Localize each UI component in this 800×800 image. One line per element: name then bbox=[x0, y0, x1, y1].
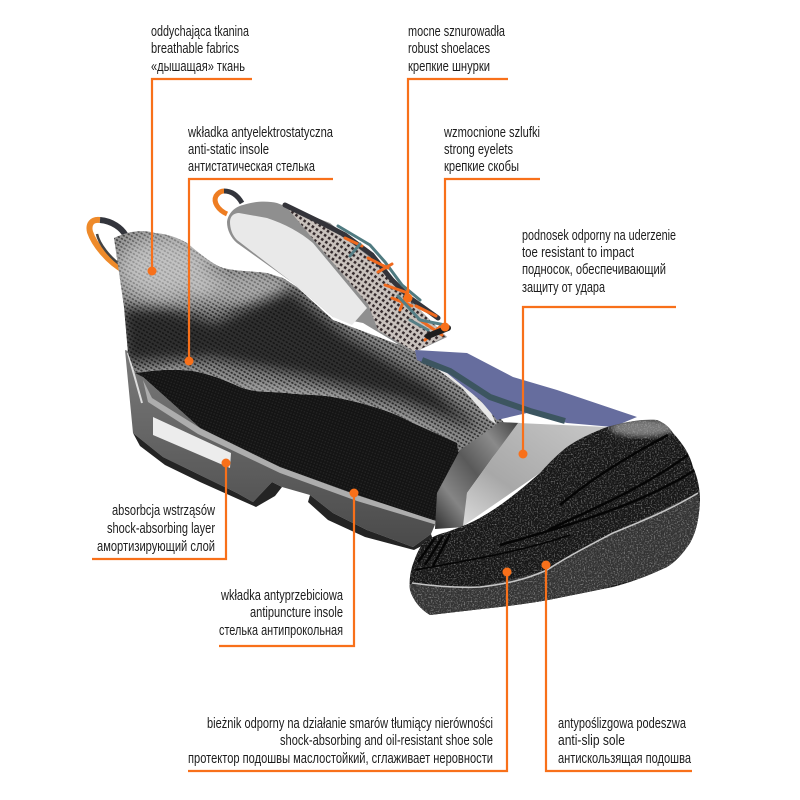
callout: anti-static insole: anti-static insole bbox=[188, 142, 269, 158]
callout: robust shoelaces: mocne sznurowadła bbox=[408, 24, 506, 40]
callout: antipuncture insole: antipuncture insole bbox=[250, 605, 343, 621]
callout: shock-absorbing layer: absorbcja wstrząsów bbox=[112, 503, 215, 519]
callout: impact resistant toe bbox=[518, 228, 676, 458]
callout: robust shoelaces bbox=[404, 24, 508, 302]
callout: antipuncture insole: стелька антипрокольная bbox=[219, 623, 343, 639]
callout: robust shoelaces: robust shoelaces bbox=[408, 41, 490, 57]
callout: impact resistant toe: подносок, обеспечивающий bbox=[522, 262, 666, 278]
callout: shock-absorbing layer: амортизирующий слой bbox=[97, 539, 215, 555]
callout: anti-slip sole bbox=[542, 560, 692, 771]
lace area mesh bbox=[285, 205, 446, 352]
breathable fabric upper bbox=[110, 225, 510, 455]
shoe illustration bbox=[89, 191, 710, 620]
callout: shoe sole bbox=[188, 568, 512, 771]
callout: impact resistant toe: toe resistant to impact bbox=[522, 245, 634, 261]
icon: heel pull loop bbox=[89, 220, 126, 271]
shoe sole side bbox=[125, 350, 437, 550]
reflective heel line bbox=[128, 353, 142, 403]
callout: strong eyelets: strong eyelets bbox=[444, 142, 513, 158]
black inner sole bbox=[135, 370, 465, 522]
tongue outer layer bbox=[227, 202, 447, 353]
callout: anti-static insole: антистатическая стелька bbox=[188, 159, 316, 175]
callout: breathable fabrics: breathable fabrics bbox=[151, 41, 239, 57]
callout: shoe sole: shock-absorbing and oil-resistant shoe sole bbox=[280, 733, 493, 749]
callout: shoe sole: протектор подошвы маслостойкий, сглаживает неровности bbox=[188, 751, 493, 767]
callout: shock-absorbing layer: shock-absorbing layer bbox=[107, 521, 215, 537]
icon: tongue pull loop bbox=[215, 191, 242, 214]
callout: antipuncture insole bbox=[219, 488, 358, 646]
blue toe fabric bbox=[415, 350, 637, 427]
callout: anti-static insole: wkładka antyelektrostatyczna bbox=[187, 125, 334, 141]
callout: anti-slip sole: антискользящая подошва bbox=[558, 751, 692, 767]
callout: anti-slip sole: antypoślizgowa podeszwa bbox=[558, 716, 687, 732]
callout: impact resistant toe: podnosek odporny na uderzenie bbox=[522, 228, 676, 244]
callout: antipuncture insole: wkładka antyprzebiciowa bbox=[220, 588, 344, 604]
callout: breathable fabrics: «дышащая» ткань bbox=[151, 59, 245, 75]
callout: breathable fabrics: oddychająca tkanina bbox=[151, 24, 250, 40]
callout: strong eyelets: wzmocnione szlufki bbox=[443, 125, 540, 141]
callout: strong eyelets: крепкие скобы bbox=[444, 159, 519, 175]
callout: shock-absorbing layer bbox=[92, 458, 230, 559]
robust shoelaces bbox=[285, 205, 448, 340]
rubber toe bumper bbox=[410, 420, 700, 615]
steel toe cap bbox=[463, 423, 607, 526]
steel toe band bbox=[435, 422, 520, 529]
callout: anti-slip sole: anti-slip sole bbox=[558, 733, 625, 749]
callout: impact resistant toe: защиту от удара bbox=[522, 280, 606, 296]
white tongue insert bbox=[230, 213, 367, 325]
callout: shoe sole: bieżnik odporny na działanie smarów tłumiący nierówności bbox=[207, 716, 493, 732]
fabric stitching detail bbox=[422, 360, 565, 421]
callout: anti-static insole bbox=[184, 125, 334, 366]
inner fabric edge near toe bbox=[417, 350, 496, 424]
callout: breathable fabrics bbox=[148, 24, 252, 276]
callout: strong eyelets bbox=[440, 125, 540, 332]
callout: robust shoelaces: крепкие шнурки bbox=[408, 59, 490, 75]
reflective strip on sole bbox=[153, 417, 231, 468]
